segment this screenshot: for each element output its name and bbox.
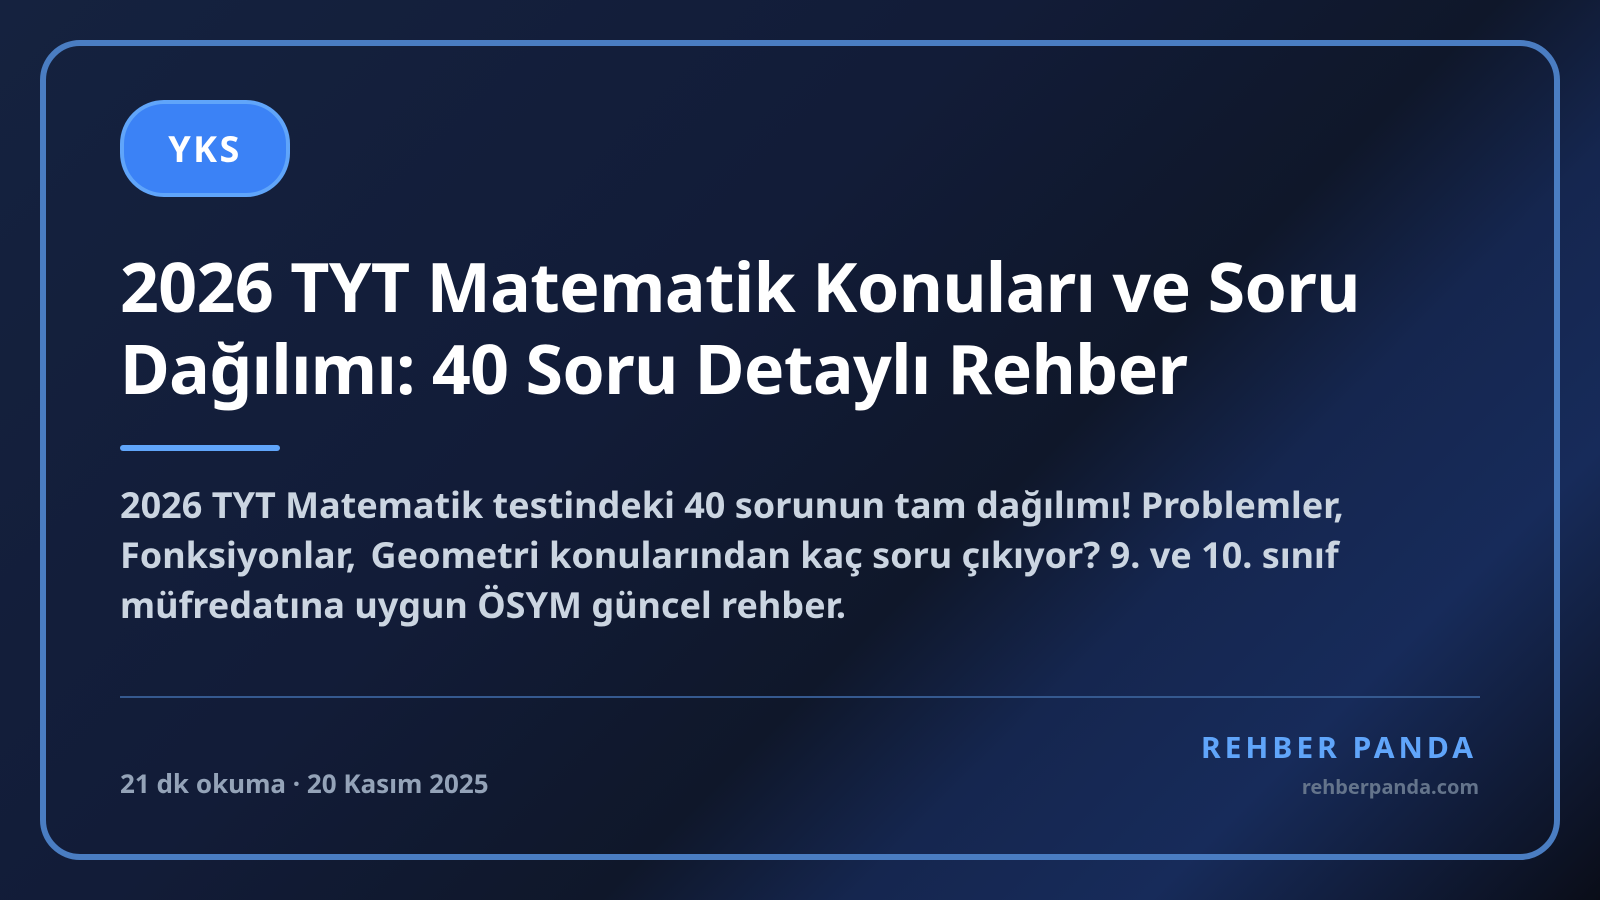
title: Dağılımı: 40 Soru Detaylı Rehber: [120, 321, 1187, 414]
title: [120, 239, 1360, 414]
description: 2026 TYT Matematik testindeki 40 sorunun tam dağılımı! Problemler,: [120, 480, 1344, 529]
description: Fonksiyonlar, Geometri konularından kaç soru çıkıyor? 9. ve 10. sınıf: [120, 530, 1339, 579]
badge: YKS: YKS: [168, 124, 242, 173]
meta: reading time and date: 21 dk okuma · 20 Kasım 2025: [120, 765, 489, 801]
description: [120, 480, 1344, 629]
accent bar: [120, 445, 280, 451]
badge: YKS: [120, 100, 290, 197]
title: 2026 TYT Matematik Konuları ve Soru: [120, 239, 1360, 332]
brand name: REHBER PANDA: [1201, 726, 1477, 767]
brand url: rehberpanda.com: [1302, 773, 1479, 800]
description: müfredatına uygun ÖSYM güncel rehber.: [120, 580, 846, 629]
